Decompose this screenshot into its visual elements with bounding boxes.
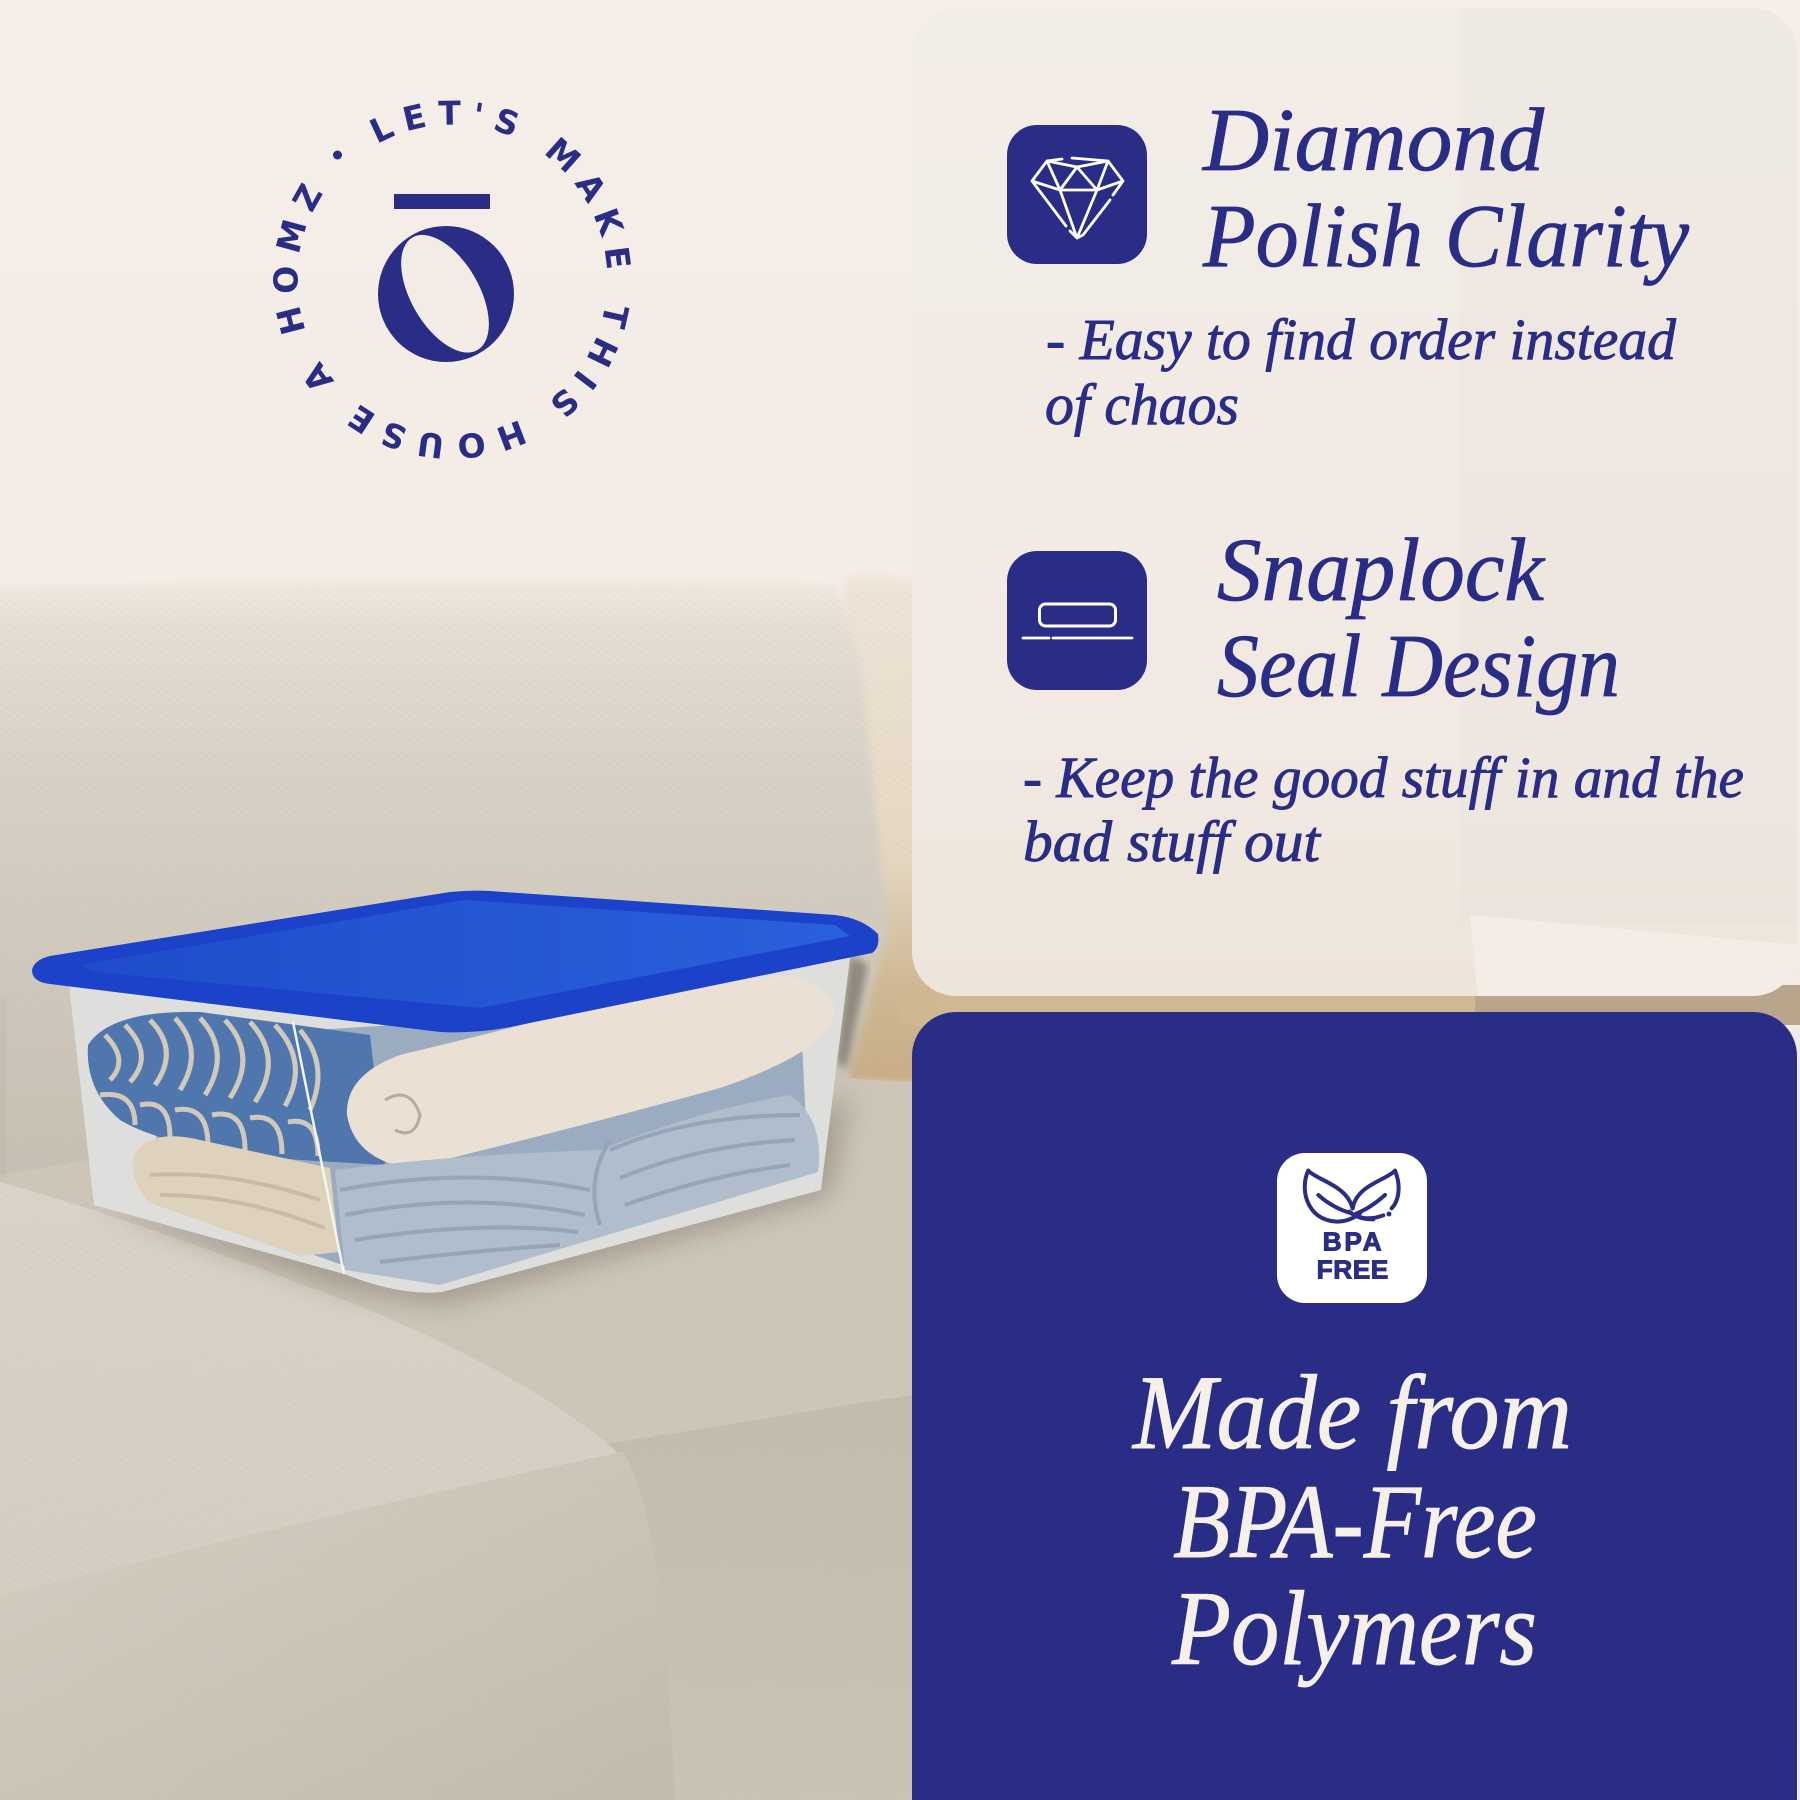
separator dot: [333, 150, 342, 160]
icon label: [1317, 1227, 1388, 1284]
sofa seat front: [600, 1392, 930, 1800]
heading: made from BPA-free polymers: [1131, 1354, 1572, 1687]
icon label: FREE: [1317, 1254, 1388, 1284]
panel: product features: [912, 107, 1797, 996]
text: keep the good stuff: [1023, 745, 1744, 874]
text: easy to find: - Easy to find order instead: [1046, 307, 1677, 372]
macron bar: [394, 194, 490, 209]
faint photo show-through in panel: [1470, 916, 1797, 996]
icon: BPA free leaves: [1277, 1153, 1427, 1303]
strip between panels: [900, 985, 1475, 1025]
contents: striped blanket: [88, 1012, 385, 1165]
sofa backrest: [0, 581, 888, 1195]
contents: blue-grey coils: [335, 1095, 819, 1285]
panel: BPA-free: [912, 1012, 1797, 1800]
logo: circular brand mark: [273, 100, 631, 459]
contents: cream towel: [347, 976, 835, 1168]
icon: diamond: [1007, 125, 1147, 264]
heading: snaplock seal design: Snaplock: [1217, 521, 1546, 620]
text: keep the good stuff: - Keep the good stuff in and the: [1023, 745, 1744, 810]
contents backing: [150, 1000, 808, 1278]
icon: snaplock seal: [1007, 551, 1147, 690]
storage box with blue lid: [32, 891, 878, 1305]
heading: diamond polish clarity: Diamond: [1201, 91, 1545, 190]
text: keep the good stuff: bad stuff out: [1023, 809, 1322, 874]
heading: made from BPA-free polymers: BPA-Free: [1173, 1463, 1537, 1580]
heading: diamond polish clarity: [1201, 91, 1689, 286]
text: easy to find: of chaos: [1045, 372, 1239, 437]
corner seam: [293, 1022, 344, 1274]
heading: diamond polish clarity: Polish Clarity: [1202, 187, 1689, 286]
icon label: BPA: [1323, 1227, 1382, 1257]
pillow behind sofa: [845, 576, 930, 1085]
heading: snaplock seal design: [1217, 521, 1620, 716]
letter O: [378, 220, 514, 367]
box shadow on backrest: [836, 955, 868, 1070]
feature: snaplock: [1007, 521, 1744, 874]
heading: snaplock seal design: Seal Design: [1217, 617, 1620, 716]
feature: diamond clarity: [1007, 91, 1689, 437]
sofa arm top: [0, 1182, 675, 1800]
box shadow: [94, 1090, 850, 1305]
sofa side seam: [0, 1000, 6, 1175]
blue lid: [32, 891, 878, 1032]
heading: made from BPA-free polymers: Made from: [1131, 1354, 1572, 1471]
frosted wall overlay: [69, 958, 850, 1293]
heading: made from BPA-free polymers: Polymers: [1171, 1570, 1537, 1687]
sofa seat: [0, 1078, 930, 1470]
sofa arm front: [0, 1452, 675, 1800]
text: easy to find: [1045, 307, 1677, 437]
circular slogan: LET'S MAKE THIS HOUSE A HOMZ: [273, 100, 631, 459]
box body: [69, 958, 850, 1293]
contents: beige rope blanket: [133, 1136, 339, 1256]
